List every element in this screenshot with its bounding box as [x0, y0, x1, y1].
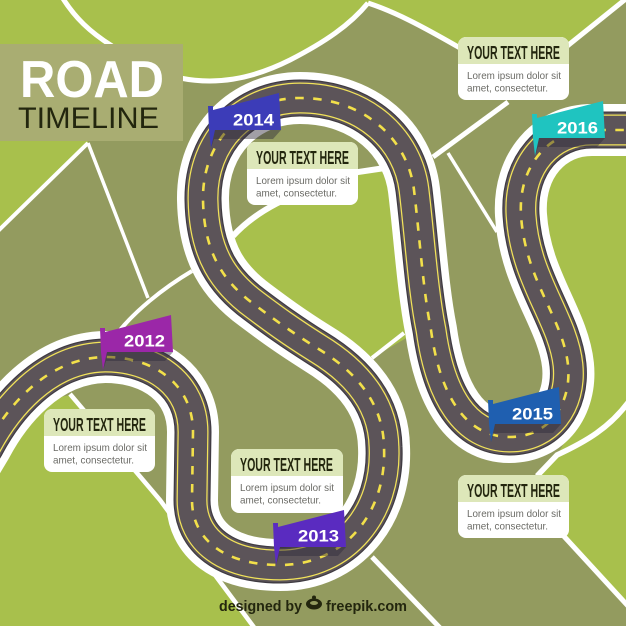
- flag: 2012: 2012: [124, 332, 165, 350]
- card: 2014: [247, 142, 358, 205]
- footer credit: [219, 596, 407, 615]
- card: 2014: Lorem ipsum dolor sit: [256, 175, 350, 187]
- footer credit: designed by: [219, 599, 302, 615]
- flag: 2014: 2014: [233, 112, 275, 130]
- card: 2012: [44, 409, 155, 472]
- flag: 2015: 2015: [512, 406, 553, 424]
- flag: 2013: [273, 510, 346, 565]
- card: top right: YOUR TEXT HERE: [467, 43, 560, 63]
- flag: 2012: [100, 315, 173, 370]
- card: 2015: [458, 475, 569, 538]
- flag: 2016: 2016: [557, 120, 598, 138]
- card: 2015: amet, consectetur.: [467, 520, 548, 532]
- card: 2013: [231, 449, 343, 513]
- card: 2013: YOUR TEXT HERE: [240, 455, 333, 475]
- card: 2015: Lorem ipsum dolor sit: [467, 508, 561, 520]
- card: 2013: Lorem ipsum dolor sit: [240, 482, 334, 494]
- title: TIMELINE: TIMELINE: [18, 102, 159, 135]
- card: top right: Lorem ipsum dolor sit: [467, 70, 561, 82]
- icon: freepik logo: [306, 596, 322, 610]
- card: 2012: Lorem ipsum dolor sit: [53, 442, 147, 454]
- flag: 2015: [488, 387, 561, 442]
- card: 2012: YOUR TEXT HERE: [53, 415, 146, 435]
- card: top right: [458, 37, 569, 100]
- flag: 2014: [208, 93, 281, 148]
- card: 2012: amet, consectetur.: [53, 454, 134, 466]
- flag: 2016: [532, 101, 605, 156]
- card: 2014: amet, consectetur.: [256, 188, 337, 200]
- card: top right: amet, consectetur.: [467, 82, 548, 94]
- card: 2013: amet, consectetur.: [240, 494, 321, 506]
- title: ROAD: ROAD: [20, 51, 164, 109]
- flag: 2013: 2013: [298, 528, 339, 546]
- footer credit: freepik.com: [326, 598, 407, 615]
- card: 2014: YOUR TEXT HERE: [256, 148, 349, 168]
- winding road: [0, 98, 626, 565]
- card: 2015: YOUR TEXT HERE: [467, 481, 560, 501]
- title panel: [0, 44, 183, 141]
